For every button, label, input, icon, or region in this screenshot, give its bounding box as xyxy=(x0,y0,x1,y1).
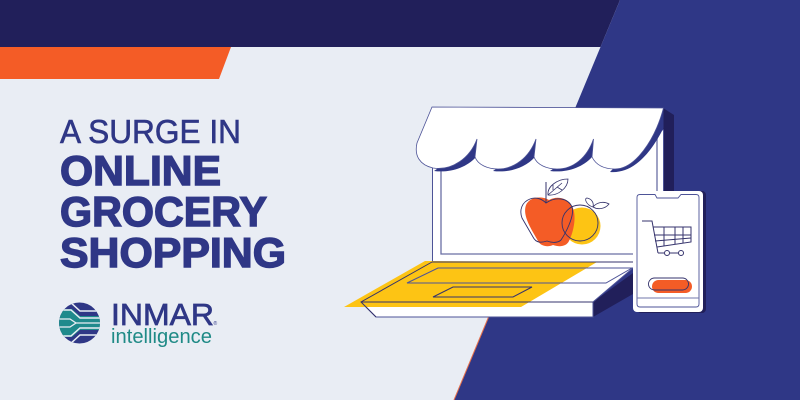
apple stem xyxy=(545,182,547,203)
awning shadow scallops xyxy=(434,108,664,172)
phone home line xyxy=(637,297,699,299)
apple outline xyxy=(521,198,573,242)
blue diagonal panel xyxy=(454,0,800,400)
title line 2: ONLINE xyxy=(60,147,221,194)
title line 3: GROCERY xyxy=(60,188,267,235)
title line 1: A SURGE IN xyxy=(60,114,241,151)
orange accent bar xyxy=(0,47,231,79)
phone inner outline xyxy=(637,194,699,307)
title line 4: SHOPPING xyxy=(60,229,286,276)
laptop base side xyxy=(593,268,640,317)
apple leaf xyxy=(548,179,568,195)
icon: shopping cart xyxy=(642,221,691,256)
orange outline xyxy=(562,205,598,241)
awning xyxy=(416,107,664,172)
title xyxy=(60,114,286,276)
keyboard and trackpad lines xyxy=(361,262,640,317)
laptop base xyxy=(361,262,640,317)
phone shadow xyxy=(637,191,706,313)
button xyxy=(648,278,692,293)
icon: apple and orange xyxy=(521,179,609,246)
phone body xyxy=(633,191,703,312)
illustration: smartphone xyxy=(633,191,706,313)
logo wordmark: INMAR xyxy=(111,298,214,332)
laptop shadow xyxy=(663,108,674,205)
yellow light xyxy=(344,261,597,307)
awning canopy xyxy=(416,107,664,169)
icon: logo globe xyxy=(59,301,101,345)
top dark band xyxy=(0,0,620,47)
registered mark: ® xyxy=(214,320,218,327)
apple fill xyxy=(525,197,575,246)
orange fill xyxy=(564,208,600,244)
logo tagline: intelligence xyxy=(111,325,212,348)
orange leaves xyxy=(586,198,609,209)
logo xyxy=(59,302,218,347)
orange accent line on panel edge xyxy=(454,316,489,400)
laptop screen xyxy=(432,125,664,262)
illustration: laptop storefront xyxy=(344,107,674,317)
